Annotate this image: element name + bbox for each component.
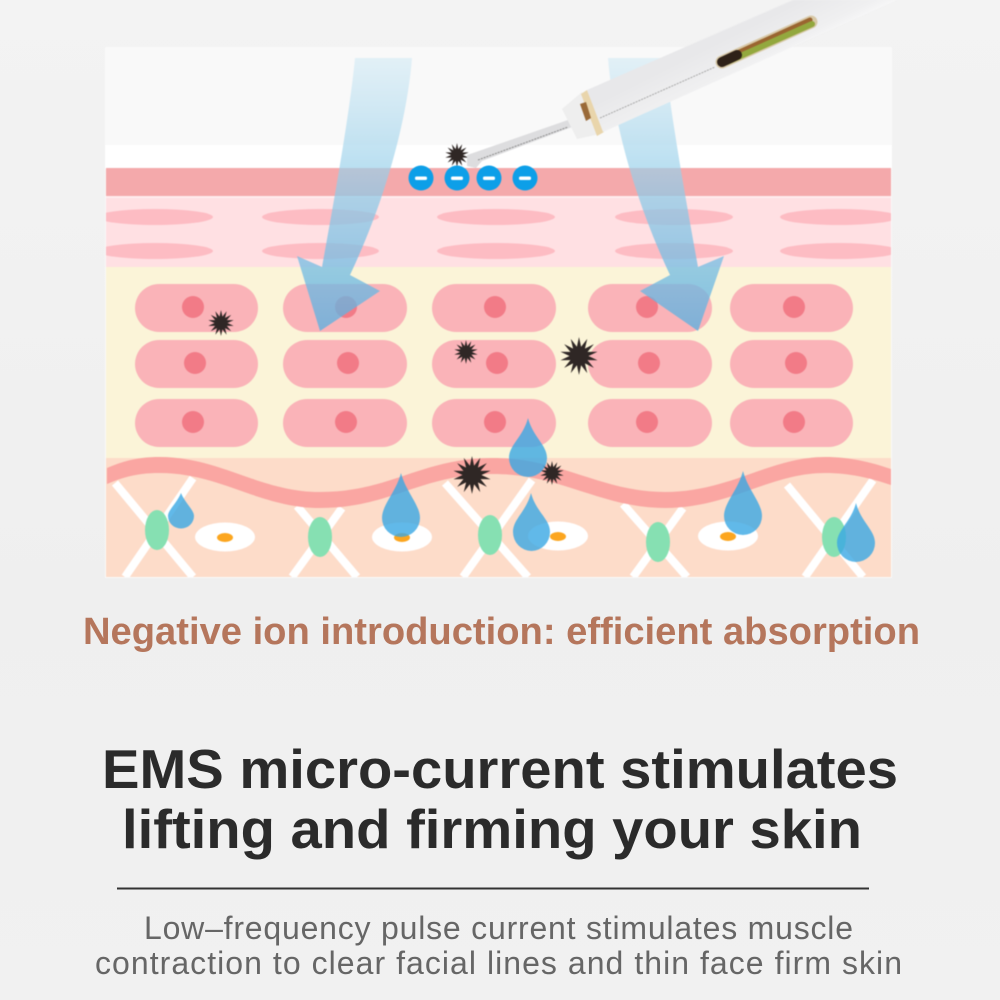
body text: pulse current description: Low–frequency pulse current stimulates muscle <box>144 910 853 946</box>
epidermis band <box>106 168 891 196</box>
icon: water drops <box>168 418 875 562</box>
cell row 2 <box>135 340 853 388</box>
icon: negative ions <box>408 166 538 190</box>
dermis layer with fibres <box>97 196 898 267</box>
cell row 1 <box>135 284 853 332</box>
body text: pulse current description <box>95 910 902 981</box>
arrow: right absorption arrow <box>608 58 724 331</box>
heading: EMS micro-current: EMS micro-current stimulates <box>102 738 898 800</box>
fat cell layer <box>106 267 891 458</box>
icon: dirt particles <box>208 143 598 494</box>
green cells <box>145 510 846 562</box>
air layer above skin <box>105 47 892 169</box>
caption: negative ion introduction: Negative ion introduction: efficient absorption <box>83 611 920 653</box>
heading: EMS micro-current <box>102 738 898 860</box>
white collagen fibres <box>115 478 873 577</box>
white glands with orange nuclei <box>195 522 758 552</box>
arrow: left absorption arrow <box>297 58 412 331</box>
cell row 3 <box>135 399 853 447</box>
wavy junction band <box>107 457 891 508</box>
subcutaneous layer with fibres and glands <box>106 457 891 577</box>
heading: EMS micro-current: lifting and firming your skin <box>122 798 862 860</box>
icon: beauty pen device <box>467 0 897 168</box>
divider line <box>117 888 869 890</box>
panel edge <box>105 47 892 578</box>
body text: pulse current description: contraction to clear facial lines and thin face firm skin <box>95 945 902 981</box>
panel: skin cross-section diagram <box>97 0 898 578</box>
